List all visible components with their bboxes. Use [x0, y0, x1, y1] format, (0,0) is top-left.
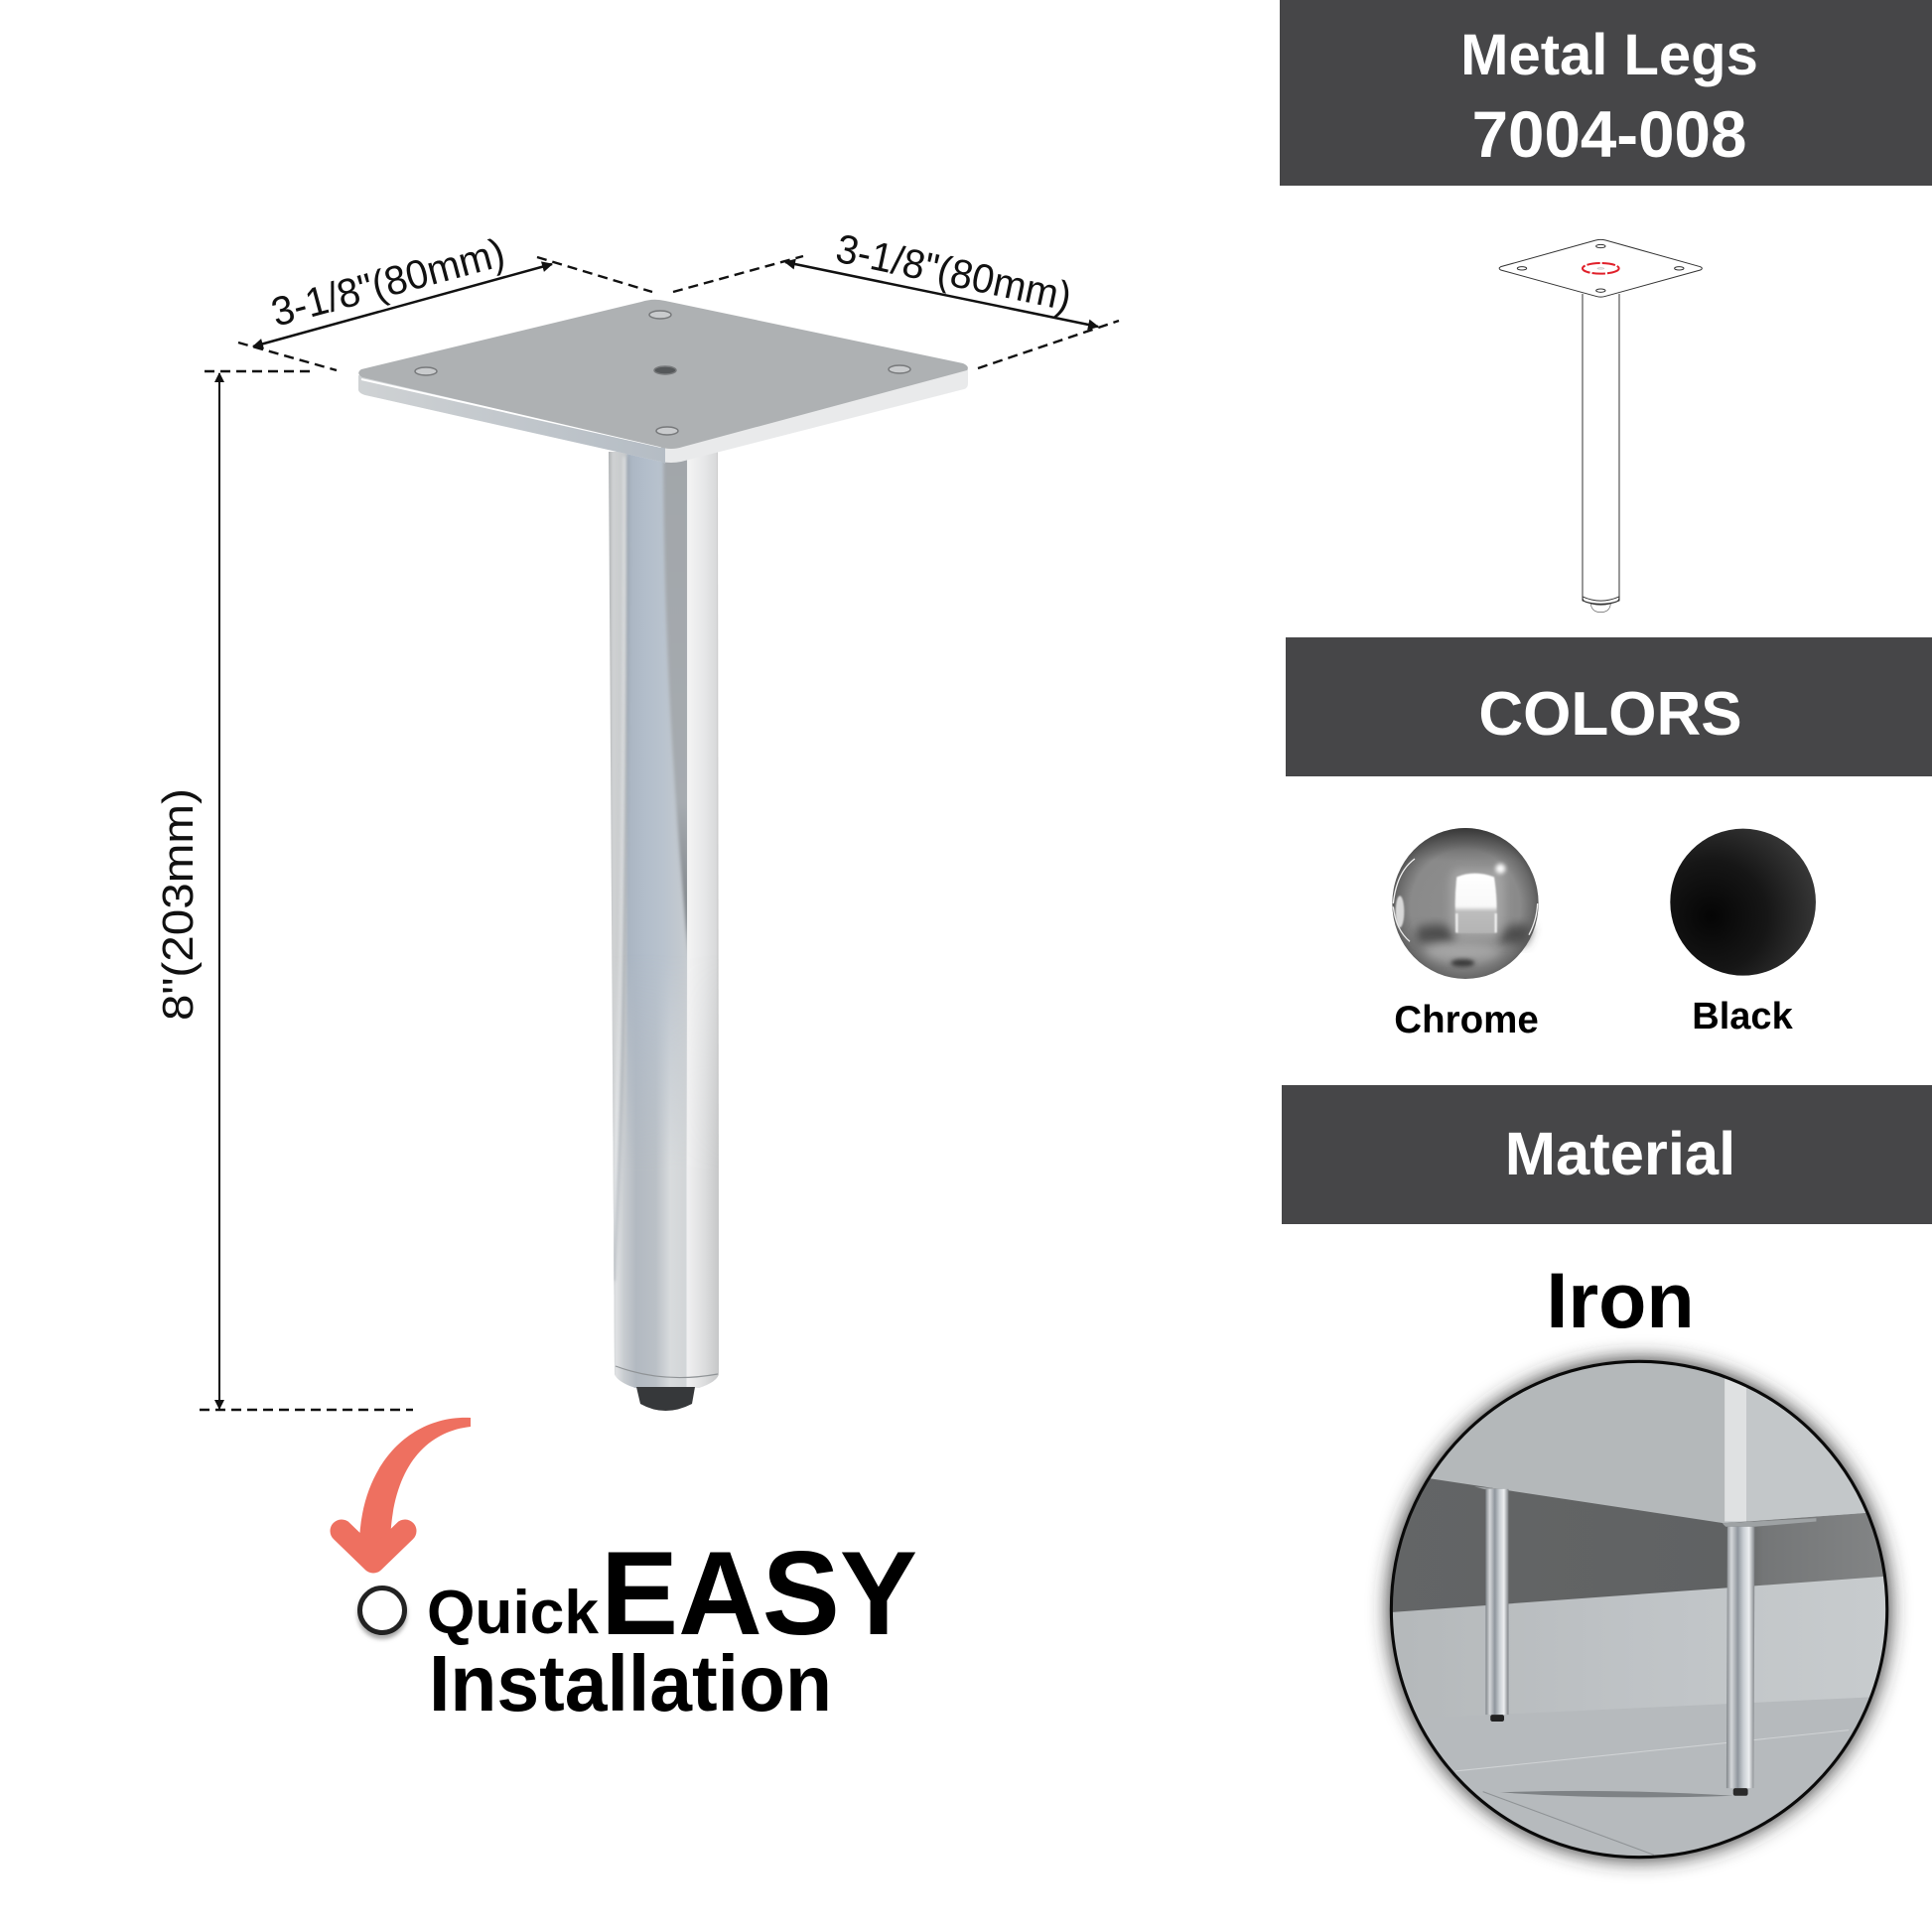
- text: quick easy installation: [427, 1527, 917, 1727]
- dimension: plate depth: [673, 225, 1119, 368]
- swatch: black: Black: [1692, 996, 1794, 1037]
- chrome sphere: [1392, 828, 1539, 979]
- dimension: plate width: 3-1/8"(80mm): [266, 229, 509, 336]
- text: iron: Iron: [1546, 1256, 1695, 1344]
- black sphere: [1670, 829, 1816, 976]
- photo: leg in use circle: [1384, 1354, 1896, 1866]
- line drawing of leg: [1499, 239, 1702, 613]
- rubber foot: [636, 1387, 695, 1411]
- dimension: plate width: [238, 229, 652, 370]
- swatch: black: [1670, 829, 1816, 1037]
- header: metal legs model: 7004-008: [1472, 98, 1746, 171]
- header: material: [1282, 1085, 1932, 1224]
- header: material: Material: [1505, 1120, 1735, 1188]
- swatch: chrome: [1392, 828, 1539, 1041]
- header: colors: [1286, 637, 1932, 776]
- product image: chrome metal leg: [358, 300, 968, 1411]
- leg tube: [609, 452, 719, 1390]
- dimension: plate depth: 3-1/8"(80mm): [832, 225, 1075, 320]
- plate screw holes: [415, 311, 910, 435]
- swatch: chrome: Chrome: [1394, 999, 1539, 1041]
- mounting plate: [358, 300, 968, 464]
- text: quick easy installation: EASY: [601, 1527, 917, 1660]
- text: quick easy installation: Quick: [427, 1579, 600, 1647]
- header: metal legs model: [1280, 0, 1932, 186]
- icon: curved coral arrow: [342, 1418, 471, 1562]
- text: quick easy installation: Installation: [429, 1639, 832, 1727]
- header: colors: COLORS: [1478, 680, 1742, 749]
- icon: installation ring: [359, 1588, 405, 1636]
- header: metal legs model: Metal Legs: [1460, 23, 1758, 87]
- dimension: height: 8"(203mm): [154, 788, 203, 1021]
